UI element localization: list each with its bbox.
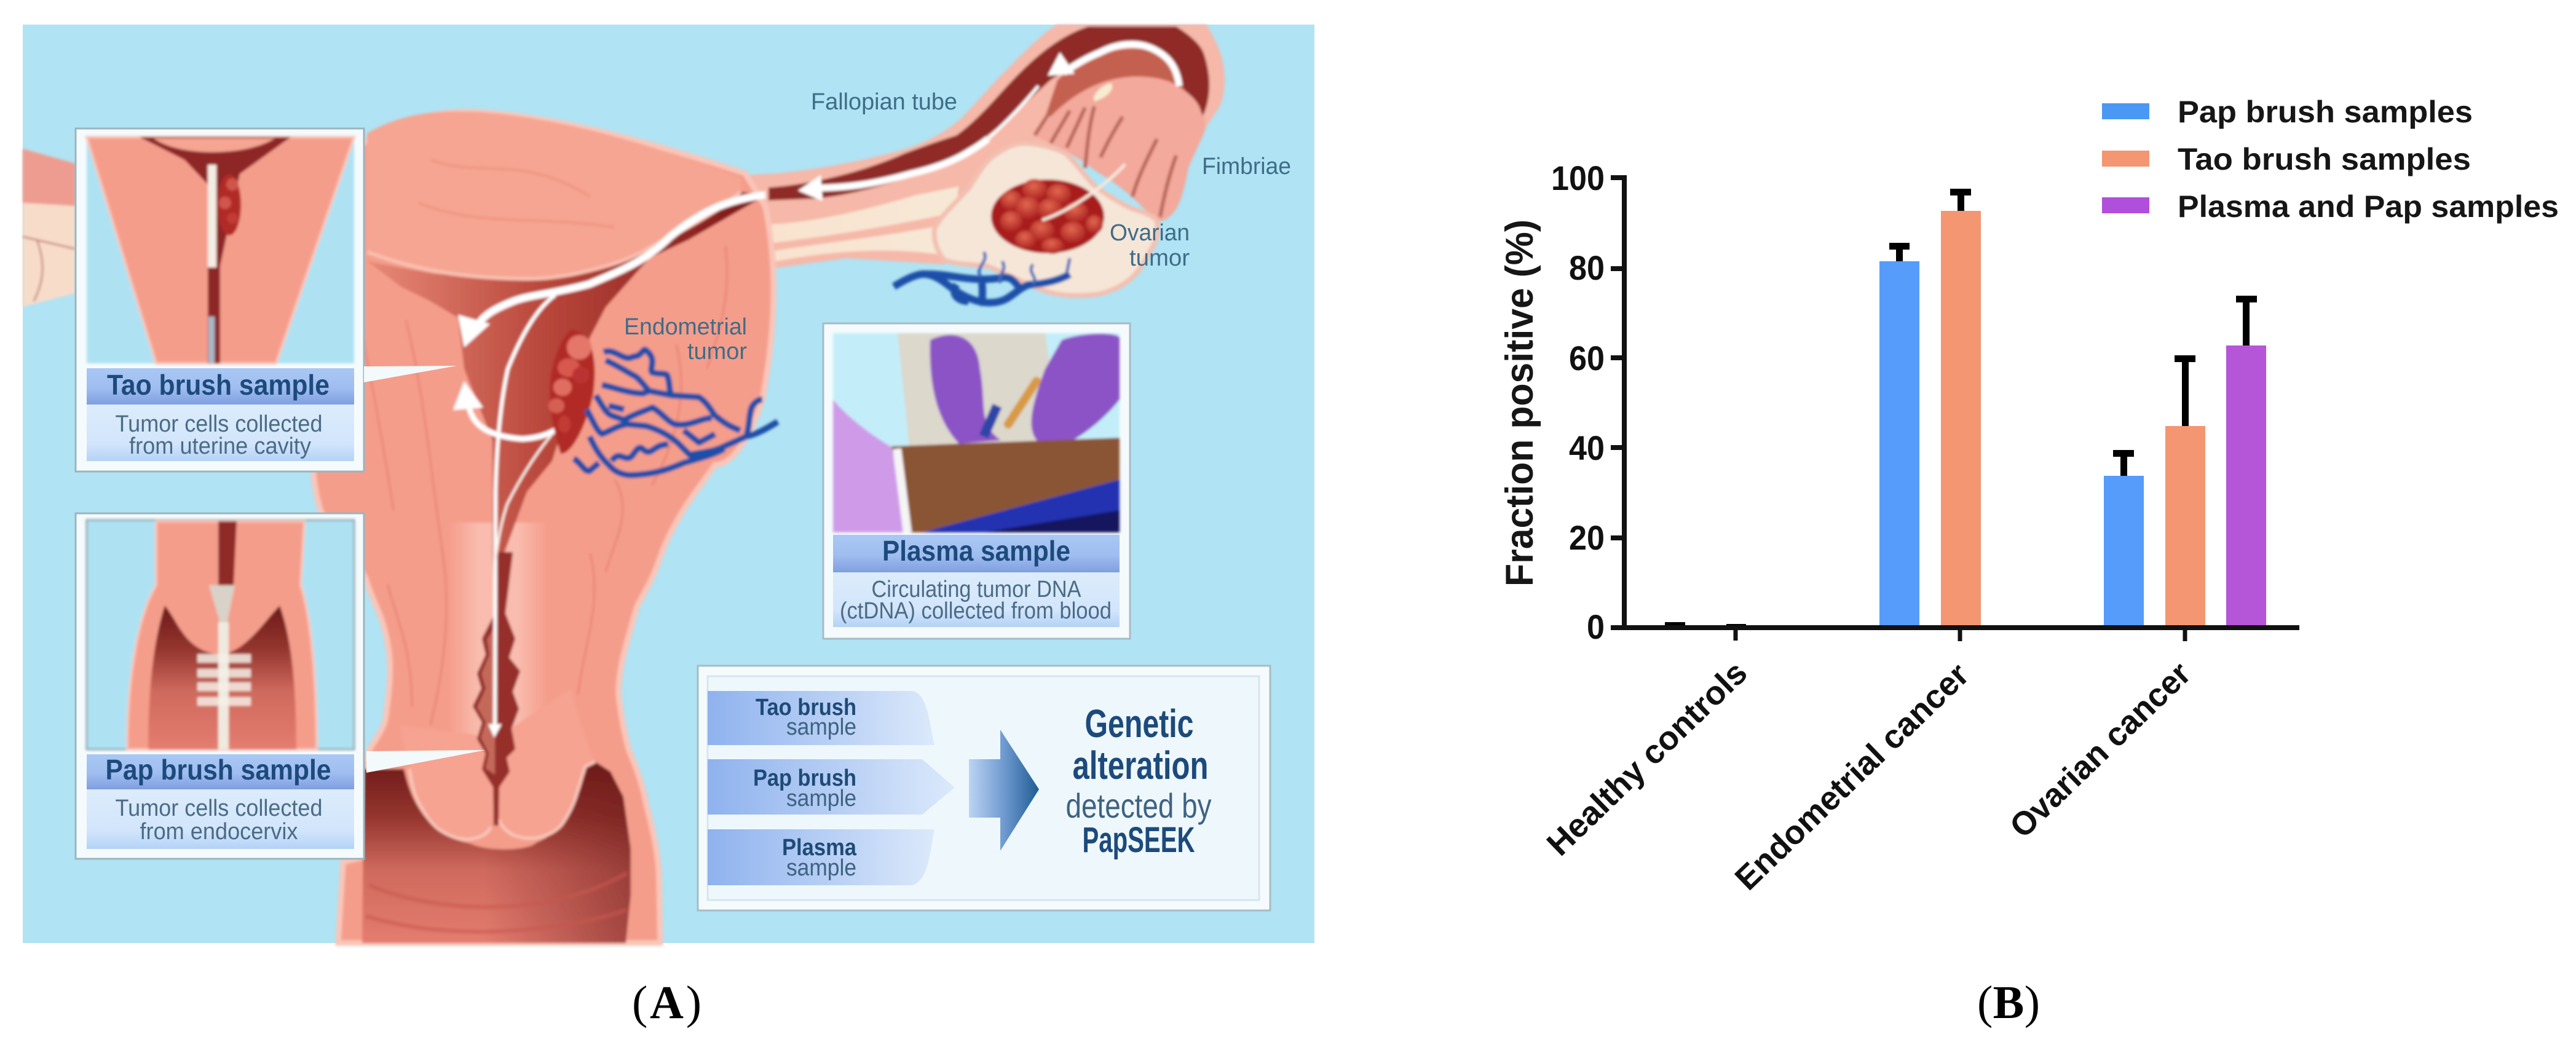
white arrow: tube	[1048, 44, 1179, 86]
cervix lobes	[400, 689, 595, 839]
category labels: Ovarian cancer	[2003, 655, 2198, 845]
right ligament band	[762, 172, 996, 268]
y axis ticks and labels: 40	[1569, 428, 1605, 467]
input bar: Pap brush: sample	[786, 786, 856, 811]
Plasma inset illustration	[833, 333, 1120, 532]
icon: ovarian tumor	[991, 164, 1125, 254]
cervical canal	[474, 553, 519, 824]
Pap description: Tumor cells collected	[116, 795, 322, 821]
label: Endometrial tumor: Endometrial	[624, 314, 747, 340]
error bars	[1665, 189, 2257, 627]
Pap title: Pap brush sample	[106, 754, 331, 786]
vagina interior	[362, 762, 631, 943]
caption A: (A)	[632, 977, 701, 1028]
y axis title: Fraction positive (%)	[1498, 219, 1541, 586]
Plasma description: Circulating tumor DNA	[872, 577, 1081, 602]
y axis ticks and labels: 100	[1551, 159, 1605, 197]
input bar: Tao brush: sample	[786, 714, 856, 740]
Plasma description panel	[833, 572, 1120, 627]
result text: PapSEEK	[1082, 820, 1195, 860]
icon: endometrial tumor	[548, 330, 595, 454]
input bar: Pap brush	[708, 759, 955, 815]
label: Endometrial tumor: tumor	[687, 339, 747, 365]
Tao description: Tumor cells collected	[116, 411, 322, 437]
Tao banner	[87, 368, 354, 405]
input bar: Pap brush: Pap brush	[753, 765, 856, 791]
result text: detected by	[1066, 786, 1211, 825]
fallopian tube	[741, 25, 1225, 216]
panel background	[23, 25, 1314, 943]
ovary	[934, 143, 1158, 296]
legend: Plasma and Pap samples: Plasma and Pap samples	[2178, 189, 2559, 224]
legend: Tao brush samples: Tao brush samples	[2178, 142, 2471, 176]
y axis ticks and labels: 20	[1569, 518, 1605, 557]
y axis ticks and labels	[1551, 159, 1605, 646]
uterus body	[312, 112, 773, 943]
pointer: Tao inset	[364, 366, 457, 382]
label: Ovarian tumor	[1110, 220, 1190, 271]
Plasma banner	[833, 535, 1120, 572]
pale lining around cervical canal	[449, 523, 547, 799]
y axis ticks and labels: 0	[1587, 607, 1605, 646]
label: Fallopian tube: Fallopian tube	[811, 89, 957, 115]
inset: Tao brush sample	[76, 128, 364, 472]
fimbriae	[1035, 77, 1205, 221]
panel B: bar chart	[1498, 95, 2559, 898]
anatomy drawing	[23, 25, 1225, 943]
left ligament stump	[23, 149, 76, 307]
inset: Plasma sample: (ctDNA) collected from blood	[840, 598, 1112, 624]
result text: alteration	[1072, 743, 1209, 787]
input bar: Plasma	[708, 829, 934, 885]
legend: Pap brush samples: Pap brush samples	[2178, 95, 2473, 129]
white arrow: mid tube	[798, 86, 1038, 201]
uterine cavity	[367, 192, 765, 614]
legend	[2102, 95, 2559, 224]
Tao description panel	[87, 405, 354, 461]
label: Ovarian tumor: Ovarian	[1110, 220, 1190, 246]
result text	[1066, 701, 1211, 860]
endometrial veins	[574, 350, 778, 475]
caption B: (B)	[1977, 977, 2040, 1028]
upper lobe of uterus	[367, 111, 741, 279]
thin white arrow: to cervix	[488, 295, 555, 738]
white arrow: from endometrial tumor	[453, 381, 567, 439]
result text: Genetic	[1085, 701, 1194, 746]
label: Fimbriae: Fimbriae	[1202, 154, 1291, 180]
label: Endometrial tumor	[624, 314, 747, 365]
wall texture	[357, 246, 727, 725]
input bar: Plasma: sample	[786, 855, 856, 881]
box: genetic alteration summary	[698, 666, 1270, 910]
Tao title: Tao brush sample	[107, 369, 330, 401]
Tao inset illustration	[87, 137, 354, 363]
input bar: Tao brush: Tao brush	[756, 695, 856, 720]
Plasma title: Plasma sample	[882, 535, 1070, 567]
Pap banner	[87, 754, 354, 789]
arrow to result	[969, 730, 1039, 851]
y axis ticks and labels: 60	[1569, 339, 1605, 377]
y axis ticks and labels: 80	[1569, 248, 1605, 287]
category labels	[1540, 654, 2198, 898]
inset: Tao brush sample: from uterine cavity	[129, 433, 311, 459]
inset: Pap brush sample	[76, 513, 364, 859]
inset: Pap brush sample: from endocervix	[140, 819, 298, 845]
category labels: Healthy controls	[1540, 654, 1754, 863]
input bar: Tao brush	[708, 691, 934, 745]
inset: Plasma sample	[823, 323, 1130, 639]
label: Ovarian tumor: tumor	[1129, 245, 1190, 271]
pointer: Pap inset	[366, 750, 486, 773]
Pap description panel	[87, 789, 354, 849]
axes	[1611, 175, 2299, 641]
category labels: Endometrial cancer	[1728, 656, 1976, 898]
panel A: anatomical illustration	[23, 25, 1314, 943]
input bar: Plasma: Plasma	[782, 835, 857, 861]
Pap inset illustration	[87, 520, 354, 749]
bars: endometrial cancer	[1879, 211, 1981, 627]
bars: ovarian cancer	[2104, 345, 2266, 627]
white arrow: to cavity	[458, 195, 765, 347]
ovarian veins	[894, 274, 1070, 304]
